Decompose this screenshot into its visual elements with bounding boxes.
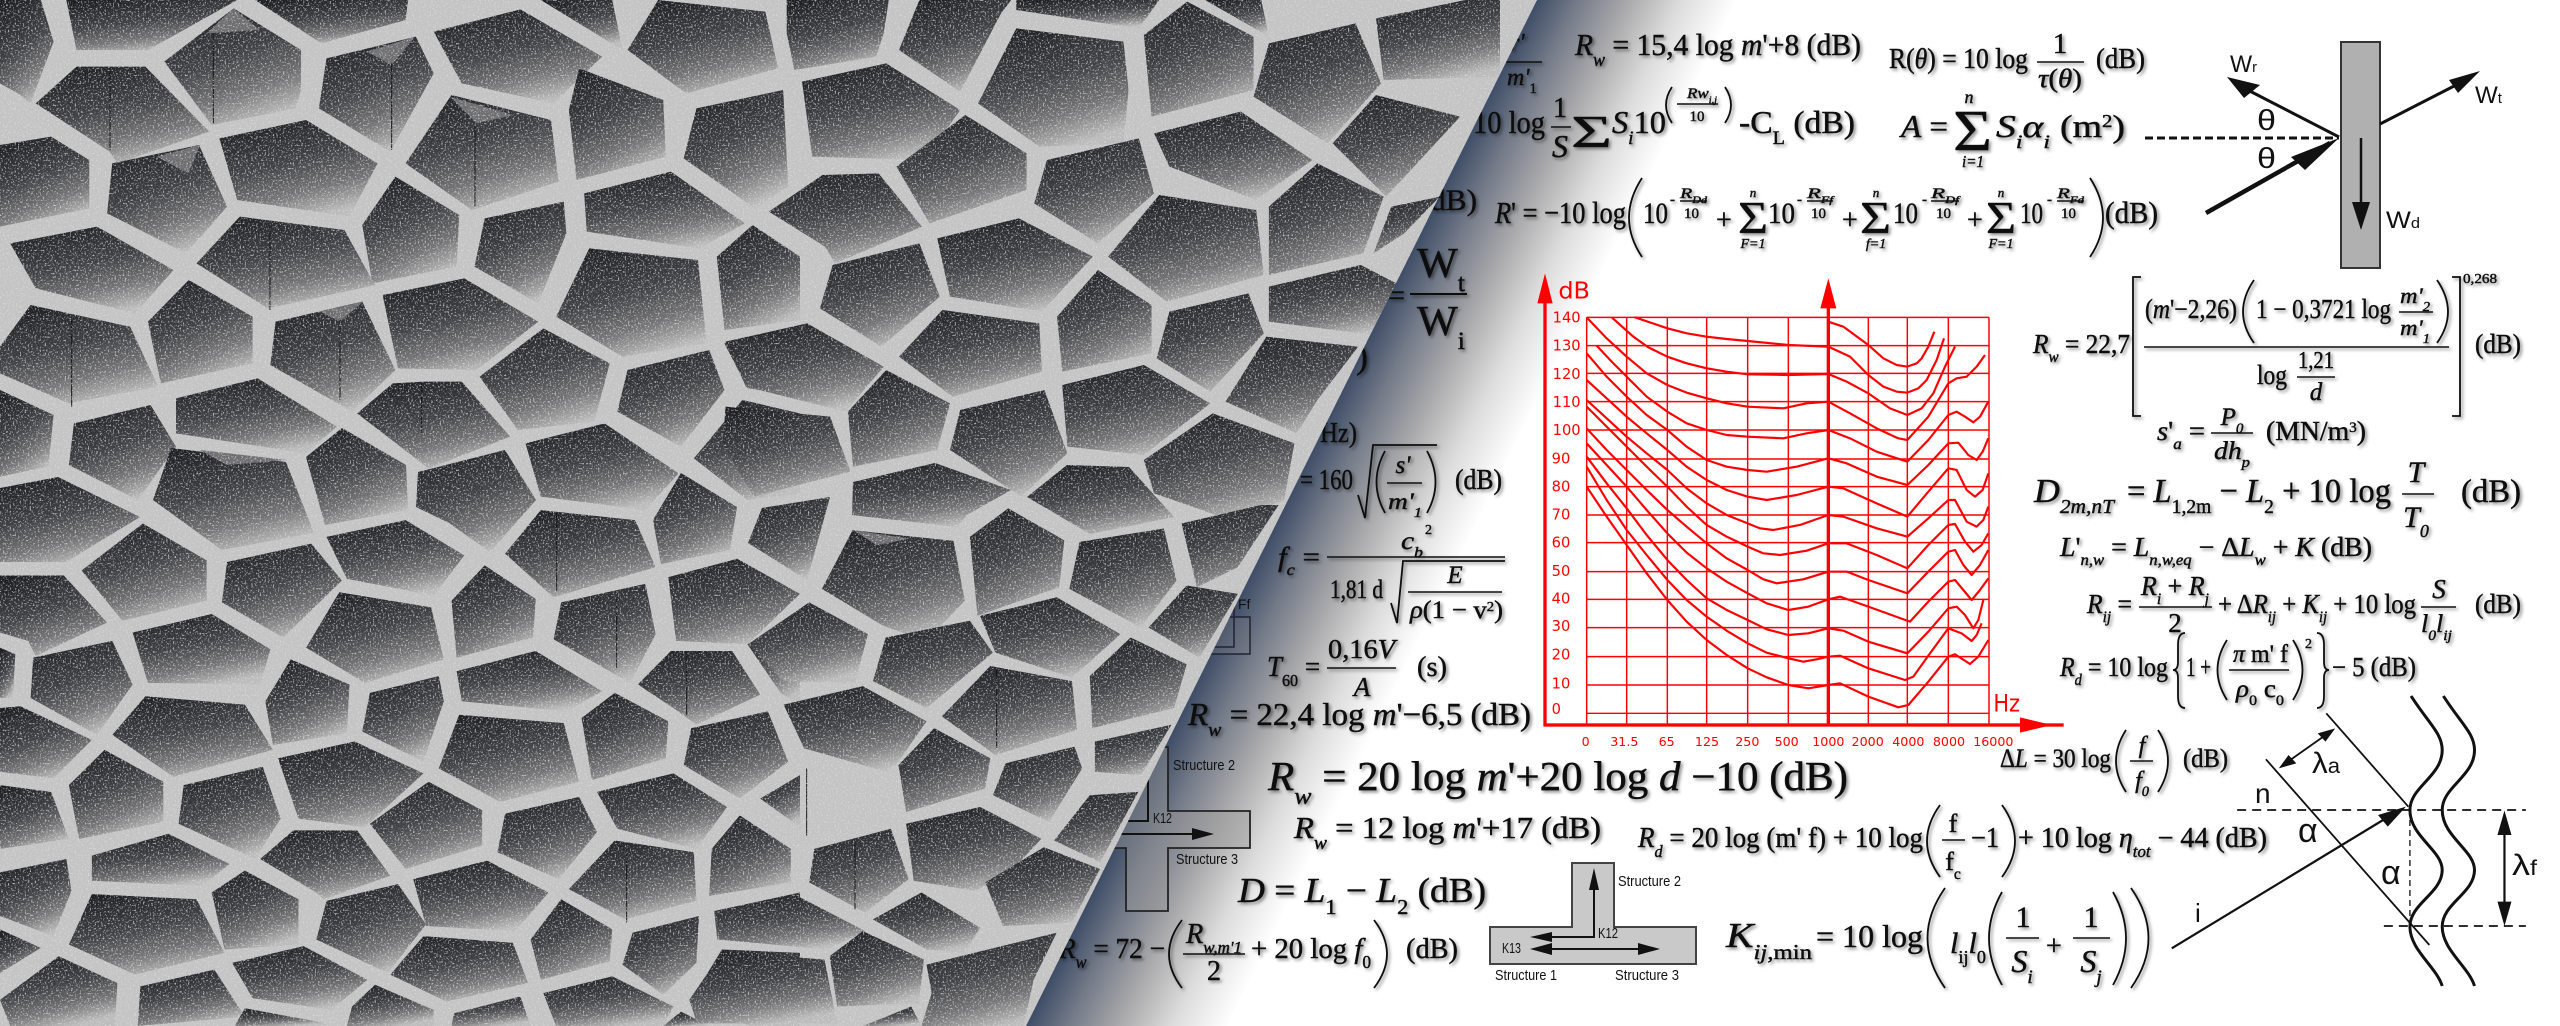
formula: 10 log sum: 10 log — [1473, 104, 1545, 140]
formula: dynamic stiffness s'a — [2157, 404, 2366, 471]
formula: Rd mf: + 10 log ηtot − 44 (dB) — [2018, 823, 2267, 860]
formula: R prime flanking sum: + — [1716, 205, 1732, 236]
formula: partly hidden paren: ) — [1356, 336, 1368, 376]
y axis tick labels: 120 — [1553, 366, 1581, 383]
formula: R theta: (dB) — [2096, 43, 2145, 75]
formula: D2m,nT: = L1,2m − L2 + 10 log — [2127, 473, 2391, 518]
formula: D2m,nT — [2033, 456, 2521, 541]
formula: Kij min: Sj — [2080, 943, 2102, 988]
formula: R prime flanking sum: F=1 — [1740, 237, 1766, 252]
formula: Rij: Rij = — [2086, 589, 2132, 626]
formula: Rw 20 log: Rw = 20 log m'+20 log d −10 (dB) — [1267, 753, 1848, 810]
formula: R prime flanking sum: 10 — [1936, 206, 1951, 222]
formula: Rw 12 log: Rw = 12 log m'+17 (dB) — [1293, 810, 1601, 854]
formula: critical frequency: E — [1446, 562, 1463, 589]
formula: 10 log sum: 10 — [1690, 109, 1704, 125]
formula: Rw 22,4: Rw = 22,4 log m'−6,5 (dB) — [1187, 696, 1531, 740]
formula: R theta: τ(θ) — [2038, 64, 2082, 93]
formula: Rd mf: fc — [1945, 847, 1961, 882]
cells across mid seam — [0, 428, 1174, 580]
axis label dB: dB — [1558, 276, 1590, 304]
formula: Kij min: 1 — [2084, 901, 2098, 934]
formula: R prime flanking sum: 10 — [1768, 197, 1795, 230]
T shape — [1490, 863, 1696, 964]
y axis tick labels: 130 — [1553, 338, 1581, 355]
formula: Rw 22,7 — [2032, 272, 2521, 416]
formula: R prime flanking sum: n — [1750, 185, 1756, 200]
formula: Rij: S — [2432, 574, 2446, 604]
loudness curves — [1587, 317, 1988, 707]
panel: formulas — [1058, 27, 2521, 988]
normal dashed line — [2145, 136, 2339, 140]
formula: R prime flanking sum: 10 — [1811, 206, 1826, 222]
formula: Kij min: lijl0 — [1950, 927, 1986, 967]
label Wt: Wt — [2475, 82, 2503, 109]
panel: diagonal shadow gradient — [1000, 0, 2560, 1026]
formula: absorption area A: Σ — [1953, 98, 1992, 163]
1000 Hz reference arrow — [1820, 278, 1836, 726]
formula: Rd mf — [1637, 805, 2267, 882]
formula: R prime flanking sum: - — [1670, 192, 1675, 208]
cells upper left — [0, 0, 800, 510]
formula: critical frequency: fc = — [1278, 542, 1320, 579]
formula: critical frequency: cb — [1401, 528, 1424, 561]
formula: Rw 22,7: log — [2257, 360, 2287, 390]
formula: Kij min: Kij,min — [1725, 916, 1813, 964]
inner path arrow — [1060, 750, 1214, 840]
arrow K12 — [1530, 868, 1599, 942]
formula: dynamic stiffness s'a: s'a = — [2157, 416, 2205, 453]
formula: Rw 22,7: m'2 — [2400, 283, 2430, 314]
formula: Kij min: Si — [2011, 943, 2033, 988]
formula: absorption area A — [1899, 87, 2125, 171]
lower cell seams — [557, 513, 997, 923]
formula: D2m,nT: T — [2408, 456, 2427, 489]
formula: Rd mf: Rd = 20 log (m' f) + 10 log — [1637, 823, 1923, 860]
formula: Rw 72: Rw = 72 − — [1058, 933, 1165, 972]
x axis tick labels: 65 — [1659, 734, 1675, 749]
diagram: T junction behind shadow — [1000, 747, 1250, 911]
formula: R prime flanking sum: - — [2047, 192, 2052, 208]
y axis with arrow — [1537, 273, 1553, 726]
labels: Structure 3 — [1176, 851, 1238, 868]
formula: Rw 22,7: 1 − 0,3721 log — [2256, 294, 2391, 324]
formula: 160 root: m' 1 — [1388, 489, 1422, 520]
y axis tick labels: 110 — [1553, 394, 1581, 411]
label n: n — [2255, 778, 2271, 809]
formula: Rw 22,7: d — [2310, 379, 2323, 406]
panel: perforated acoustic wall photo — [0, 0, 1540, 1026]
labels: K12 — [1153, 810, 1172, 827]
formula: R prime flanking sum: 10 — [1893, 197, 1918, 230]
formula: Rd radiation: π m' f — [2233, 641, 2289, 668]
formula: R theta: R(θ) = 10 log — [1889, 43, 2028, 75]
angle labels — [2257, 105, 2276, 175]
formula: Rw 72: 2 — [1207, 956, 1221, 987]
formula: R prime flanking sum: 10 — [2061, 206, 2076, 222]
grid lines — [1587, 317, 1989, 725]
cells lower left — [0, 510, 800, 1026]
formula: Rd radiation: Rd = 10 log — [2059, 652, 2168, 689]
diagram: coincidence wave — [2172, 696, 2537, 986]
formula: 10 log sum: Si10 — [1612, 104, 1666, 148]
formula: R prime flanking sum — [1494, 178, 2158, 257]
y axis tick labels: 70 — [1552, 506, 1570, 523]
formula: R prime flanking sum: 10 — [1643, 197, 1668, 230]
formula: 160 root — [1300, 445, 1502, 520]
formula: Rw 22,7: Rw = 22,7 — [2032, 329, 2130, 366]
y axis tick labels: 100 — [1553, 422, 1581, 439]
label alpha lower: α — [2381, 854, 2401, 892]
x axis tick labels: 500 — [1775, 734, 1799, 749]
y axis tick labels: 60 — [1552, 534, 1570, 551]
y axis tick labels: 0 — [1552, 701, 1561, 718]
x axis tick labels: 1000 — [1812, 734, 1844, 749]
diagram: T junction structures — [1490, 863, 1696, 984]
formula: partly hidden ratio — [1503, 30, 1542, 97]
arrow: reflected — [2227, 77, 2339, 137]
formula: absorption area A: A = — [1899, 108, 1948, 144]
formula: Rw 22,7: (m'−2,26) — [2145, 294, 2237, 324]
formula: R prime flanking sum: R Dd — [1679, 186, 1708, 205]
formula: Delta L: f — [2139, 733, 2149, 759]
formula: R prime flanking sum: Σ — [1986, 192, 2016, 243]
formula: 160 root: = 160 — [1300, 465, 1353, 496]
formula: R prime flanking sum: n — [1873, 185, 1879, 200]
formula: Rd radiation: − 5 (dB) — [2332, 652, 2416, 682]
arrow: transmitted — [2380, 71, 2480, 124]
formula: R theta: 1 — [2053, 28, 2067, 60]
formula: R prime flanking sum: R' = −10 log — [1494, 195, 1626, 230]
formula: D2m,nT: (dB) — [2461, 474, 2521, 510]
formula: D level difference: D = L1 − L2 (dB) — [1237, 871, 1486, 919]
label Wd: Wd — [2386, 207, 2420, 234]
formula: Rd radiation — [2059, 633, 2416, 709]
formula: R prime flanking sum: R Ff — [1805, 186, 1835, 205]
formula: Rd radiation: 1 + — [2186, 652, 2211, 682]
formula: Rij: Ri + Rj — [2140, 571, 2209, 608]
formula: 10 log sum: S — [1552, 128, 1568, 164]
label i: i — [2195, 898, 2201, 928]
formula: R prime flanking sum: R Fd — [2056, 186, 2085, 205]
formula: Rij — [2086, 571, 2521, 644]
formula: R prime flanking sum: n — [1998, 185, 2004, 200]
x axis tick labels: 8000 — [1933, 734, 1965, 749]
labels: Structure 1 — [1495, 967, 1557, 984]
formula: Kij min — [1725, 888, 2148, 988]
x axis tick labels: 125 — [1695, 734, 1719, 749]
y axis tick labels: 30 — [1552, 618, 1570, 635]
formula: Kij min: 1 — [2016, 901, 2030, 934]
formula: Rw 72: Rw,m'1 — [1185, 919, 1242, 956]
formula: Rd mf: −1 — [1971, 823, 1999, 854]
formula: Rw 22,7: m'1 — [2400, 315, 2430, 346]
label Wr: Wr — [2230, 51, 2257, 78]
formula: Rd radiation: 2 — [2305, 637, 2312, 652]
formula: Kij min: = 10 log — [1816, 918, 1923, 954]
formula: T60: T60 = — [1267, 652, 1320, 690]
diagram: fragment Ff: Ff — [1238, 596, 1251, 612]
y axis tick labels: 80 — [1552, 479, 1570, 496]
y axis tick labels: 10 — [1552, 675, 1570, 692]
label lambda a: λa — [2312, 747, 2340, 780]
formula: partly hidden ratio: m'1 — [1507, 65, 1537, 97]
formula: absorption area A: n — [1964, 87, 1974, 107]
labels: Structure 2 — [1618, 873, 1681, 890]
cells lower right — [689, 505, 1279, 1026]
junction shape — [1000, 747, 1250, 911]
formula: 10 log sum: Rw i,j — [1686, 86, 1718, 105]
formula: T60: 0,16V — [1328, 634, 1399, 664]
formula: 10 log sum: Σ — [1571, 106, 1612, 157]
formula: absorption area A: Siαi — [1996, 108, 2050, 152]
formula: Rw 22,7: (dB) — [2475, 329, 2521, 359]
formula: dynamic stiffness s'a: P0 — [2220, 404, 2244, 437]
label lambda f: λf — [2512, 849, 2537, 882]
y axis tick labels: 40 — [1552, 591, 1570, 608]
y axis tick labels: 140 — [1553, 309, 1581, 326]
formula: transmission coefficient Wt over Wi: Wi — [1417, 299, 1465, 354]
formula: R prime flanking sum: Σ — [1860, 192, 1891, 243]
formula: Rij: 2 — [2168, 608, 2182, 638]
formula: Rw 22,7: 0,268 — [2463, 272, 2497, 287]
axis label Hz: Hz — [1993, 690, 2020, 718]
x axis tick labels: 0 — [1582, 734, 1590, 749]
formula: Rd mf: f — [1949, 809, 1958, 838]
formula: R prime flanking sum: Σ — [1738, 192, 1768, 243]
angle labels: θ — [2257, 105, 2276, 137]
formula: Rd radiation: ρ0 c0 — [2235, 676, 2284, 709]
formula: Rij: (dB) — [2475, 589, 2521, 619]
cell ceiling wedges and seams — [72, 8, 513, 465]
formula: dynamic stiffness s'a: (MN/m3) — [2266, 416, 2366, 446]
wave lines and rays — [2172, 696, 2526, 986]
formula: R prime flanking sum: (dB) — [2105, 195, 2158, 230]
y axis tick labels: 50 — [1552, 563, 1570, 580]
formula: critical frequency: 2 — [1425, 523, 1432, 538]
cells upper right — [723, 0, 1500, 520]
formula: D2m,nT: D2m,nT — [2033, 473, 2116, 518]
formula: absorption area A: (m 2) — [2060, 108, 2125, 144]
formula: T60 — [1267, 634, 1447, 702]
formula: R prime flanking sum: 10 — [2020, 197, 2043, 230]
arrow K13 — [1530, 943, 1660, 955]
arrow: incident — [2206, 138, 2339, 213]
x axis tick labels: 250 — [1735, 734, 1759, 749]
formula: R prime flanking sum: - — [1797, 192, 1802, 208]
formula: Rij: + ΔRij + Kij + 10 log — [2218, 589, 2416, 626]
surface speckle — [0, 0, 1540, 1026]
formula: R prime flanking sum: - — [1922, 192, 1927, 208]
y axis tick labels: 20 — [1552, 647, 1570, 664]
formula: 160 root: (dB) — [1455, 465, 1502, 496]
formula: partly hidden Hz: Hz) — [1320, 418, 1357, 449]
angle labels: θ — [2257, 143, 2276, 175]
formula: 160 root: s' — [1395, 452, 1411, 479]
formula: transmission coefficient Wt over Wi — [1388, 241, 1467, 354]
formula: T60: A — [1352, 672, 1371, 702]
formula: R theta — [1889, 28, 2145, 93]
wall section — [2341, 42, 2380, 268]
y axis tick labels — [1552, 309, 1581, 718]
formula: critical frequency: 1,81 d — [1330, 575, 1383, 604]
formula: R prime flanking sum: 10 — [1684, 206, 1699, 222]
y axis tick labels: 90 — [1552, 451, 1570, 468]
diagram: fragment Ff — [1170, 596, 1251, 654]
x axis tick labels: 16000 — [1973, 734, 2013, 749]
formula: absorption area A: i=1 — [1962, 152, 1984, 171]
formula: Delta L — [2000, 730, 2228, 800]
formula: L'n,w: L'n,w = Ln,w,eq − ΔLw + K (dB) — [2059, 532, 2372, 569]
formula: critical frequency: ρ(1 − v 2) — [1409, 597, 1503, 624]
x axis tick labels — [1582, 734, 2013, 749]
formula: critical frequency — [1278, 523, 1505, 624]
label alpha upper: α — [2298, 812, 2318, 850]
formula: Rij: l0lij — [2421, 611, 2452, 644]
formula: transmission coefficient Wt over Wi: = — [1388, 279, 1405, 312]
x axis tick labels: 2000 — [1852, 734, 1884, 749]
formula: Delta L: (dB) — [2183, 744, 2228, 773]
x axis with arrow — [1544, 717, 2064, 733]
formula: D2m,nT: T0 — [2403, 501, 2429, 541]
formula: R prime flanking sum: + — [1967, 205, 1983, 236]
arrow: dissipated — [2352, 138, 2370, 230]
labels — [1153, 757, 1238, 868]
formula: R prime flanking sum: f=1 — [1866, 237, 1886, 252]
formula: transmission coefficient Wt over Wi: Wt — [1417, 241, 1465, 296]
chart: equal loudness curves — [1537, 273, 2064, 749]
formula: Rw 22,7: 1,21 — [2298, 348, 2334, 374]
formula: 10 log sum: 1 — [1553, 93, 1567, 124]
x axis tick labels: 4000 — [1892, 734, 1924, 749]
formula: Delta L: ΔL = 30 log — [2000, 744, 2111, 773]
formula: Rw 72: + 20 log f0 — [1251, 933, 1371, 972]
x axis tick labels: 31.5 — [1610, 734, 1638, 749]
formula: 10 log sum — [1473, 86, 1855, 164]
labels: Structure 3 — [1615, 967, 1679, 984]
diagram: sound power on wall — [2145, 42, 2503, 268]
formula: dynamic stiffness s'a: dhp — [2214, 438, 2251, 471]
labels: K12 — [1598, 925, 1618, 942]
formula: Rw 72: (dB) — [1406, 933, 1458, 965]
labels — [1495, 873, 1681, 984]
formula: partly hidden ratio: r' — [1510, 30, 1525, 56]
formula: partly hidden dB: dB) — [1430, 184, 1477, 217]
formula: Kij min: + — [2046, 931, 2062, 962]
formula: T60: (s) — [1417, 652, 1447, 683]
formula: R prime flanking sum: F=1 — [1988, 237, 2014, 252]
formula: Rw 72 — [1058, 919, 1458, 988]
labels: Structure 2 — [1173, 757, 1235, 774]
formula: R prime flanking sum: + — [1842, 205, 1858, 236]
formula: R prime flanking sum: R Df — [1929, 186, 1961, 205]
formula: Delta L: f0 — [2135, 768, 2150, 800]
formula: Rw 15,4: Rw = 15,4 log m'+8 (dB) — [1574, 27, 1861, 70]
formula: 10 log sum: -CL (dB) — [1739, 104, 1855, 148]
labels: K13 — [1502, 940, 1521, 957]
wall surface — [0, 0, 1540, 1026]
